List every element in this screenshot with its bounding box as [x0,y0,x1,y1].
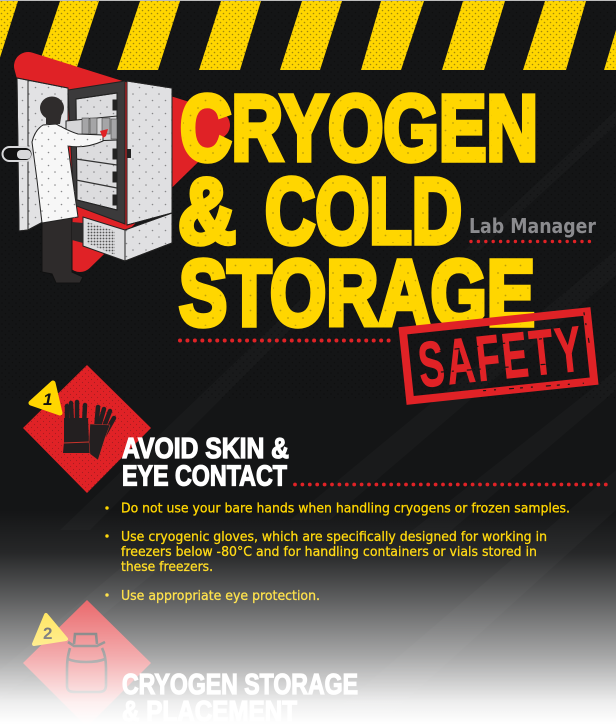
illustration: scientist at freezer [2,78,172,283]
stamp: SAFETY: SAFETY [415,313,587,402]
icon: gloves [63,402,114,460]
badge: number 1 [31,383,60,413]
red rounded triangle behind freezer [28,66,216,258]
section 1 [23,365,606,604]
heading: avoid skin and eye contact: AVOID SKIN & [122,433,289,465]
title: COLD [265,159,462,263]
bullet list: freezers below -80°C and for handling containers or vials stored in [121,545,537,560]
icon: scientist [32,96,108,283]
hazard stripes banner [0,0,616,70]
bullet list: Use cryogenic gloves, which are specifically designed for working in [121,530,547,545]
title dotted rule [180,338,390,342]
badge: number 1: 1 [43,390,52,409]
icon: freezer cabinet [66,81,172,261]
logo: Lab Manager: Lab Manager [469,214,596,238]
title: & [178,159,236,263]
section 2 [23,600,358,724]
heading: avoid skin and eye contact [122,433,289,492]
bullet list: Do not use your bare hands when handling cryogens or frozen samples. [121,502,570,516]
icon: freezer open door [2,78,68,231]
bullet list: Use appropriate eye protection. [121,589,320,604]
icon: cryogen dewar [67,634,106,692]
badge: number 2: 2 [43,624,52,643]
heading: cryogen storage and placement [122,669,358,724]
heading: avoid skin and eye contact: EYE CONTACT [122,460,287,492]
bullet list [105,502,570,604]
bullet list: these freezers. [121,560,213,575]
heading: cryogen storage and placement: CRYOGEN STORAGE [122,669,358,701]
dotted rule [295,483,606,486]
white fade overlay [0,510,616,724]
badge: number 2 [34,615,66,644]
icon: red diamond [23,365,151,493]
icon: red diamond [23,600,151,724]
title [178,76,538,345]
